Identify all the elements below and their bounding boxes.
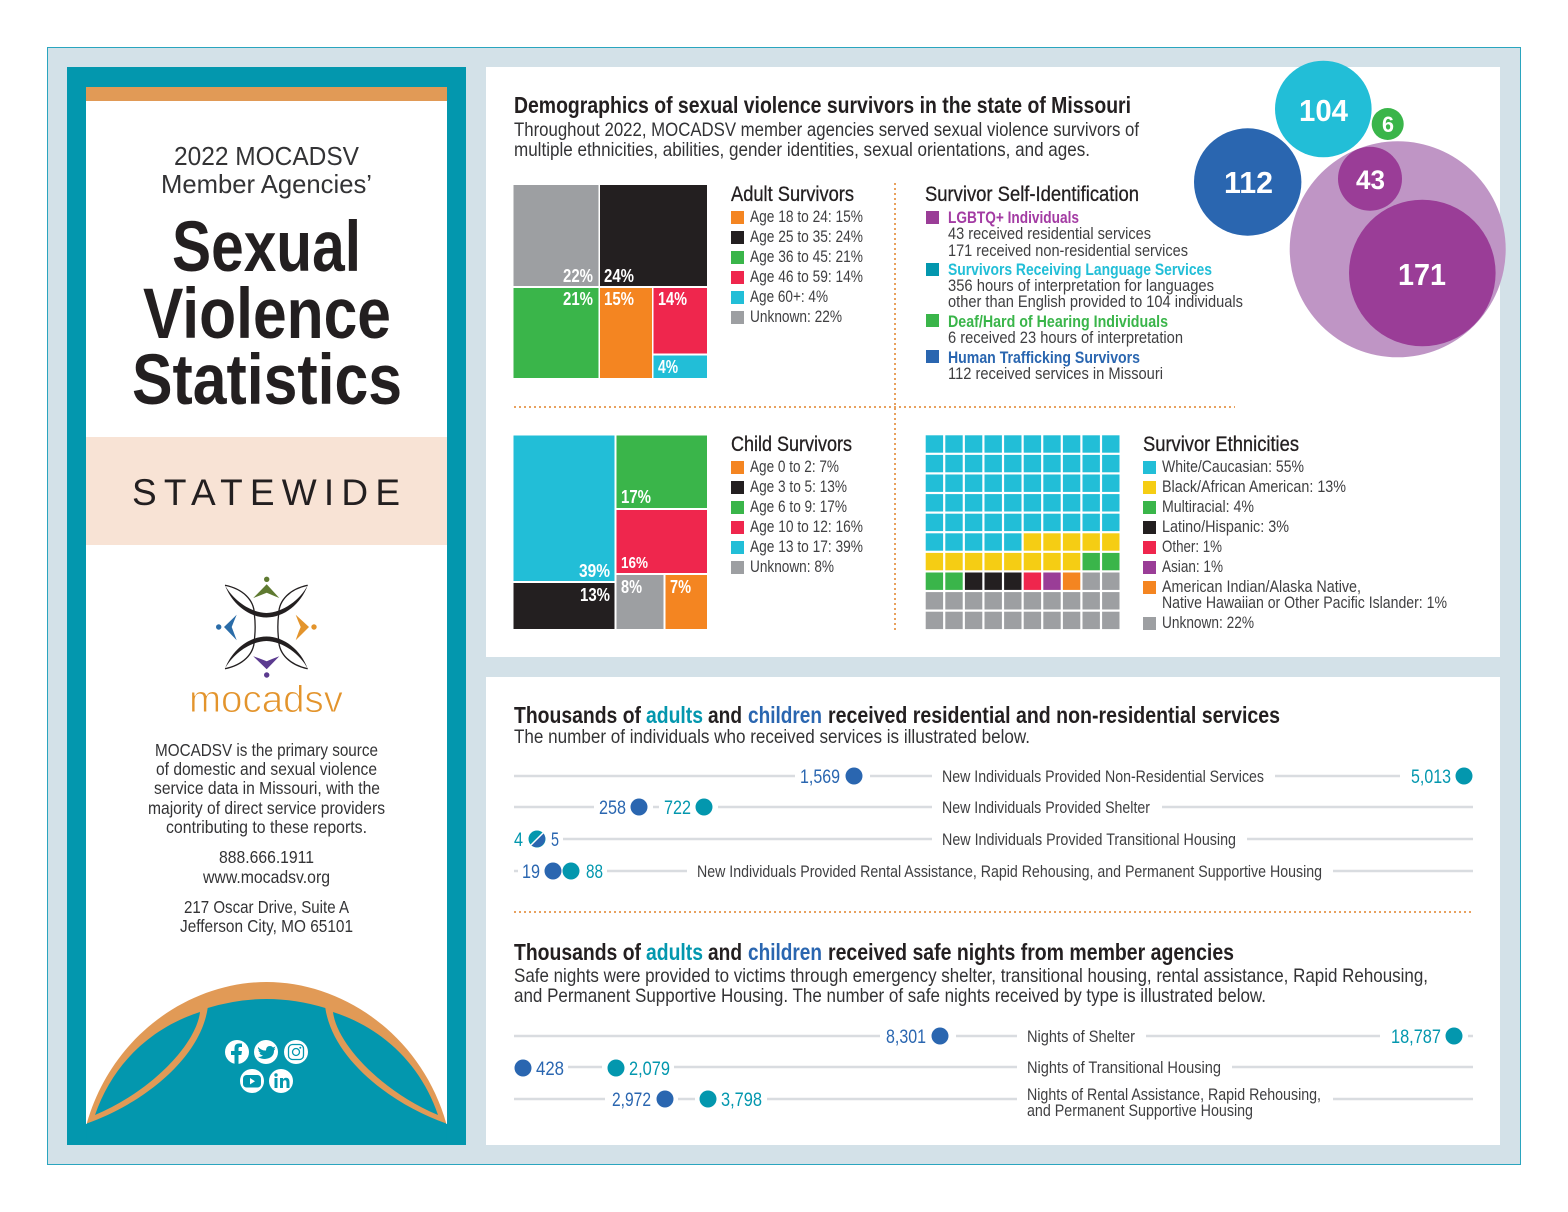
row: nights of transitional housing: 428 xyxy=(536,1059,564,1080)
legend: adult survivors: Adult Survivors xyxy=(731,183,854,206)
chart: child survivors treemap: 7% xyxy=(670,577,691,597)
legend: survivor self-identification xyxy=(925,183,1243,383)
legend: adult survivors: Unknown: 22% xyxy=(750,308,842,326)
safe nights paragraph: Safe nights were provided to victims through emergency shelter, transitional housing, rental assistance, Rapid Rehousing, xyxy=(514,965,1428,987)
safe nights paragraph: and Permanent Supportive Housing. The number of safe nights received by type is illustrated below. xyxy=(514,985,1266,1007)
heading: safe nights: and xyxy=(708,939,742,965)
safe nights paragraph xyxy=(514,965,1428,1007)
legend: child survivors: Age 0 to 2: 7% xyxy=(750,458,839,476)
sidebar contact details: 888.666.1911 xyxy=(219,847,314,867)
heading: safe nights xyxy=(514,939,1234,965)
row: rental assistance: New Individuals Provided Rental Assistance, Rapid Rehousing, and Permanent Supportive Housing xyxy=(697,863,1322,881)
chart: adult survivors treemap: 4% xyxy=(658,357,678,377)
row: transitional housing: New Individuals Provided Transitional Housing xyxy=(942,831,1236,849)
row: nights of transitional housing: Nights of Transitional Housing xyxy=(1027,1059,1221,1077)
icon: mocadsv logo xyxy=(189,577,343,721)
sidebar subtitle xyxy=(161,141,372,199)
row: shelter: 258 xyxy=(599,798,626,819)
legend: child survivors xyxy=(731,433,863,576)
chart: self-identification bubbles: 171 xyxy=(1398,257,1446,292)
legend: survivor self-identification: Deaf/Hard of Hearing Individuals xyxy=(948,313,1168,331)
heading: demographics: Demographics of sexual violence survivors in the state of Missouri xyxy=(514,92,1131,118)
legend: survivor self-identification: 112 received services in Missouri xyxy=(948,365,1163,383)
heading: services received: and xyxy=(708,702,742,728)
chart: adult survivors treemap: 22% xyxy=(563,266,593,286)
row: transitional housing: 5 xyxy=(551,830,559,851)
row: non-residential services: New Individuals Provided Non-Residential Services xyxy=(942,768,1264,786)
statewide band xyxy=(86,437,447,545)
intro paragraph: multiple ethnicities, abilities, gender identities, sexual orientations, and ages. xyxy=(514,139,1090,161)
legend: child survivors: Age 13 to 17: 39% xyxy=(750,538,863,556)
icon: twitter xyxy=(254,1040,278,1064)
legend: survivor self-identification: Survivors Receiving Language Services xyxy=(948,261,1212,279)
heading: services received: adults xyxy=(646,702,703,728)
row: nights of shelter: Nights of Shelter xyxy=(1027,1028,1135,1046)
icon: linkedin xyxy=(269,1069,293,1093)
sidebar title: Sexual xyxy=(172,208,361,287)
sidebar description: of domestic and sexual violence xyxy=(156,759,377,779)
legend: adult survivors: Age 60+: 4% xyxy=(750,288,828,306)
legend: adult survivors: Age 25 to 35: 24% xyxy=(750,228,863,246)
row: nights of shelter: 18,787 xyxy=(1391,1027,1441,1048)
row: shelter: New Individuals Provided Shelter xyxy=(942,799,1150,817)
chart: adult survivors treemap: 21% xyxy=(563,289,593,309)
row: transitional housing xyxy=(514,830,1473,851)
row: rental assistance: 88 xyxy=(586,862,603,883)
legend: survivor ethnicities: Native Hawaiian or Other Pacific Islander: 1% xyxy=(1162,594,1447,612)
row: nights of rental assistance: and Permanent Supportive Housing xyxy=(1027,1102,1253,1120)
sidebar title: Violence xyxy=(143,275,391,354)
panel: sidebar xyxy=(67,67,466,1145)
legend: survivor ethnicities: Unknown: 22% xyxy=(1162,614,1254,632)
sidebar description xyxy=(148,740,385,837)
sidebar description: majority of direct service providers xyxy=(148,798,385,818)
chart: adult survivors treemap: 14% xyxy=(658,289,687,309)
row: nights of rental assistance xyxy=(514,1086,1473,1120)
heading: safe nights: received safe nights from member agencies xyxy=(828,939,1234,965)
legend: survivor self-identification: 43 received residential services xyxy=(948,225,1151,243)
legend: survivor ethnicities: American Indian/Alaska Native, xyxy=(1162,578,1361,596)
chart: adult survivors treemap xyxy=(514,185,707,378)
legend: adult survivors xyxy=(731,183,863,326)
sidebar orange top bar xyxy=(86,87,447,101)
icon: youtube xyxy=(240,1069,264,1093)
legend: survivor ethnicities: Multiracial: 4% xyxy=(1162,498,1254,516)
heading: services received: Thousands of xyxy=(514,702,641,728)
legend: child survivors: Age 3 to 5: 13% xyxy=(750,478,847,496)
legend: survivor self-identification: LGBTQ+ Individuals xyxy=(948,209,1079,227)
row: nights of rental assistance: 3,798 xyxy=(721,1090,762,1111)
sidebar description: service data in Missouri, with the xyxy=(154,778,380,798)
chart: child survivors treemap: 16% xyxy=(621,555,648,572)
chart: self-identification bubbles: 43 xyxy=(1356,165,1385,195)
row: nights of transitional housing xyxy=(514,1059,1473,1080)
chart: self-identification bubbles: 6 xyxy=(1382,112,1394,137)
intro paragraph: Throughout 2022, MOCADSV member agencies served sexual violence survivors of xyxy=(514,119,1139,141)
row: transitional housing: 4 xyxy=(514,830,523,851)
row: nights of rental assistance: 2,972 xyxy=(612,1090,651,1111)
services subheading: The number of individuals who received services is illustrated below. xyxy=(514,726,1030,748)
chart: child survivors treemap: 8% xyxy=(621,577,642,597)
chart: ethnicities waffle xyxy=(926,435,1120,629)
legend: child survivors: Unknown: 8% xyxy=(750,558,834,576)
legend: child survivors: Child Survivors xyxy=(731,433,852,456)
legend: survivor ethnicities: Asian: 1% xyxy=(1162,558,1223,576)
sidebar subtitle: Member Agencies’ xyxy=(161,169,372,199)
row: non-residential services xyxy=(514,767,1472,788)
legend: survivor ethnicities: Other: 1% xyxy=(1162,538,1222,556)
dome graphic xyxy=(86,982,447,1145)
row: nights of shelter: 8,301 xyxy=(886,1027,926,1048)
chart: child survivors treemap: 39% xyxy=(579,561,610,581)
dotted dividers xyxy=(514,183,1235,630)
legend: adult survivors: Age 36 to 45: 21% xyxy=(750,248,863,266)
row: nights of shelter xyxy=(514,1027,1473,1048)
legend: survivor self-identification: Survivor Self-Identification xyxy=(925,183,1139,206)
legend: survivor ethnicities: White/Caucasian: 55% xyxy=(1162,458,1304,476)
statewide band: STATEWIDE xyxy=(132,472,400,513)
chart: adult survivors treemap: 15% xyxy=(604,289,634,309)
legend: survivor self-identification: 6 received 23 hours of interpretation xyxy=(948,329,1183,347)
heading: services received: children xyxy=(748,702,822,728)
row: nights of rental assistance: Nights of Rental Assistance, Rapid Rehousing, xyxy=(1027,1086,1321,1104)
chart: child survivors treemap xyxy=(514,436,707,629)
chart: child survivors treemap: 13% xyxy=(580,585,610,605)
chart: adult survivors treemap: 24% xyxy=(604,266,634,286)
chart: self-identification bubbles: 104 xyxy=(1299,93,1349,128)
legend: survivor self-identification: 356 hours of interpretation for languages xyxy=(948,277,1214,295)
icon: mocadsv logo: mocadsv xyxy=(189,679,343,721)
heading: safe nights: adults xyxy=(646,939,703,965)
chart: self-identification bubbles: 112 xyxy=(1224,165,1273,200)
sidebar title: Statistics xyxy=(132,341,402,420)
sidebar title xyxy=(132,208,402,420)
sidebar contact details: 217 Oscar Drive, Suite A xyxy=(184,897,349,917)
panel: demographics xyxy=(486,67,1500,657)
chart: child survivors treemap: 17% xyxy=(621,487,651,507)
sidebar contact details: www.mocadsv.org xyxy=(202,867,330,887)
legend: survivor ethnicities xyxy=(1143,433,1447,632)
sidebar subtitle: 2022 MOCADSV xyxy=(174,141,360,171)
panel: services xyxy=(486,677,1500,1145)
legend: adult survivors: Age 46 to 59: 14% xyxy=(750,268,863,286)
legend: child survivors: Age 10 to 12: 16% xyxy=(750,518,863,536)
row: shelter: 722 xyxy=(664,798,691,819)
heading: safe nights: children xyxy=(748,939,822,965)
icon: instagram xyxy=(284,1040,308,1064)
icon: facebook xyxy=(225,1040,249,1064)
row: non-residential services: 5,013 xyxy=(1411,767,1451,788)
legend: survivor self-identification: other than English provided to 104 individuals xyxy=(948,293,1243,311)
legend: survivor self-identification: 171 received non-residential services xyxy=(948,242,1188,260)
chart: self-identification bubbles xyxy=(1194,61,1506,357)
legend: child survivors: Age 6 to 9: 17% xyxy=(750,498,847,516)
sidebar contact details: Jefferson City, MO 65101 xyxy=(180,916,353,936)
heading: safe nights: Thousands of xyxy=(514,939,641,965)
sidebar description: MOCADSV is the primary source xyxy=(155,740,378,760)
legend: survivor ethnicities: Black/African American: 13% xyxy=(1162,478,1346,496)
sidebar contact details xyxy=(180,847,353,936)
dotted divider xyxy=(514,911,1473,913)
sidebar description: contributing to these reports. xyxy=(166,817,367,837)
heading: services received xyxy=(514,702,1280,728)
row: rental assistance xyxy=(514,862,1473,883)
legend: adult survivors: Age 18 to 24: 15% xyxy=(750,208,863,226)
row: shelter xyxy=(514,798,1473,819)
row: non-residential services: 1,569 xyxy=(800,767,840,788)
legend: survivor ethnicities: Survivor Ethnicities xyxy=(1143,433,1299,456)
legend: survivor ethnicities: Latino/Hispanic: 3% xyxy=(1162,518,1289,536)
intro paragraph xyxy=(514,119,1139,161)
row: rental assistance: 19 xyxy=(522,862,540,883)
legend: survivor self-identification: Human Trafficking Survivors xyxy=(948,349,1140,367)
row: nights of transitional housing: 2,079 xyxy=(629,1059,670,1080)
heading: services received: received residential and non-residential services xyxy=(828,702,1280,728)
